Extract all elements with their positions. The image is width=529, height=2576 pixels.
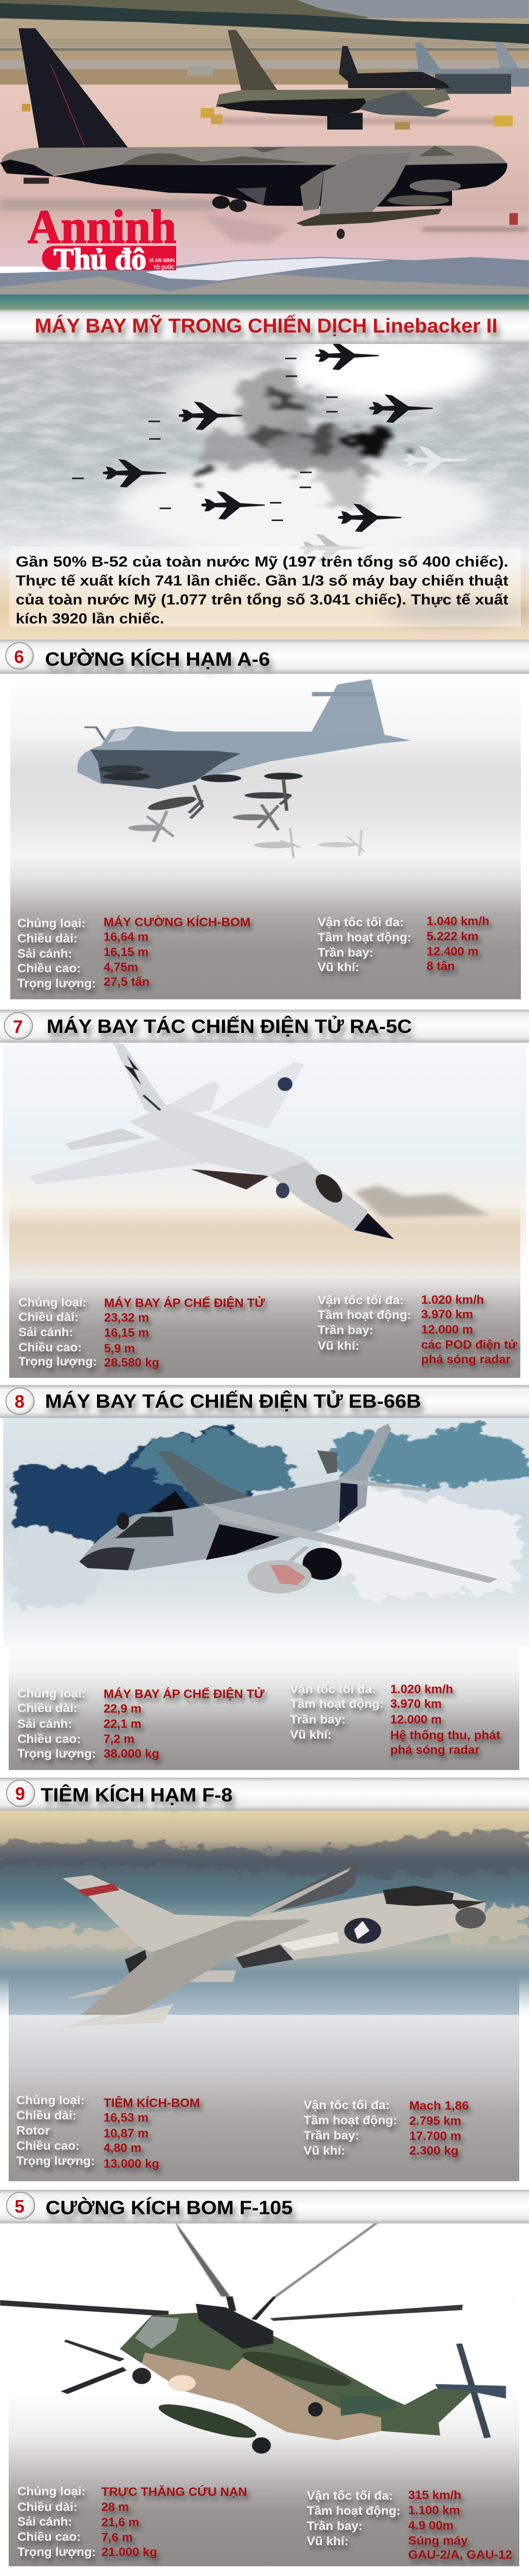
panel: A-6 attack aircraft (10, 674, 521, 999)
icon: helicopter (0, 2297, 506, 2454)
panel: hero photo of B-52 bombers (0, 0, 529, 310)
data table: helicopter specifications: TRỰC THĂNG CỨU NẠN (101, 2485, 247, 2499)
icon: upper rotor blades (175, 2204, 404, 2297)
data table: A-6 specifications: Vũ khí: (318, 960, 359, 974)
data table: helicopter specifications: 21.000 kg (101, 2545, 157, 2559)
badge 7: 7 (13, 1017, 23, 1037)
data table: A-6 specifications: Sải cánh: (17, 947, 72, 960)
heading text: TIÊM KÍCH HẠM F-8 (41, 1784, 233, 1806)
badge 7 (4, 1013, 33, 1039)
title bar (0, 310, 529, 344)
data table: helicopter specifications: Vũ khí: (307, 2534, 349, 2548)
data table: helicopter specifications: 21,6 m (101, 2515, 139, 2529)
logo: An ninh Thủ đô: TỔ QUỐC (153, 263, 175, 271)
data table: F-8 specifications: Tầm hoạt động: (304, 2113, 397, 2127)
data table: RA-5C specifications: Vũ khí: (318, 1339, 359, 1352)
icon: F-8 wing tip (54, 2004, 173, 2031)
data table: A-6 specifications: Trọng lượng: (17, 977, 96, 990)
data table: helicopter specifications: GAU-2/A, GAU-12 (408, 2548, 512, 2561)
logo: An ninh Thủ đô (28, 201, 176, 276)
data table: F-8 specifications: Trần bay: (304, 2129, 359, 2142)
icon: A-6 aircraft (78, 679, 411, 789)
data table: RA-5C specifications: 3.970 km (421, 1307, 473, 1321)
data table: helicopter specifications: Súng máy (408, 2534, 468, 2547)
data table: helicopter specifications: Sải cánh: (17, 2515, 72, 2528)
data table: RA-5C specifications: 12.000 m (421, 1323, 473, 1336)
data table: A-6 specifications: Vận tốc tối đa: (318, 915, 404, 929)
badge 8: 8 (15, 1391, 24, 1411)
text block: intro statistics: của toàn nước Mỹ (1.077 trên tổng số 3.041 chiếc). Thực tế xuất (16, 591, 508, 608)
data table: F-8 specifications: Chiều cao: (16, 2139, 80, 2152)
icon: RA-5C aircraft (29, 1043, 394, 1239)
badge 6 (5, 642, 34, 669)
data table: helicopter specifications: Trần bay: (307, 2519, 363, 2533)
text block: intro statistics: kích 3920 lần chiếc. (16, 610, 164, 627)
heading: section 8 (0, 1385, 529, 1418)
data table: A-6 specifications: 1.040 km/h (427, 914, 489, 928)
data table: A-6 specifications: Chủng loại: (17, 916, 86, 930)
data table: A-6 specifications: 27,5 tấn (104, 975, 150, 988)
heading: section 5 (0, 2190, 529, 2223)
data table: EB-66B specifications: 38.000 kg (104, 1747, 159, 1760)
logo: An ninh Thủ đô: VÌ AN NINH (149, 257, 175, 264)
background mountain (354, 1185, 489, 1217)
data table: F-8 specifications: Rotor (16, 2124, 50, 2137)
data table: helicopter specifications: Trọng lượng: (17, 2545, 96, 2559)
data table: RA-5C specifications: Chủng loại: (18, 1296, 87, 1309)
data table: RA-5C specifications: phá sóng radar (421, 1352, 511, 1366)
data table: A-6 specifications: 12.400 m (427, 945, 479, 958)
panel: EB-66B electronic warfare aircraft (0, 1418, 529, 1771)
data table: A-6 specifications: 16,64 m (104, 930, 149, 944)
data table: RA-5C specifications: 16,15 m (104, 1326, 149, 1339)
data table: RA-5C specifications (18, 1293, 517, 1369)
data table: EB-66B specifications: Hệ thống thu, phát (390, 1728, 501, 1742)
icon: F-8 aircraft (62, 1863, 486, 2015)
data table: A-6 specifications: Trần bay: (318, 946, 373, 959)
data table: EB-66B specifications: Vận tốc tối đa: (290, 1682, 376, 1696)
background: cloud texture (0, 344, 529, 558)
heading text: CƯỜNG KÍCH BOM F-105 (46, 2197, 293, 2219)
panel: F-8 naval fighter (0, 1811, 529, 2181)
data table: F-8 specifications: 4,80 m (104, 2141, 141, 2155)
badge 5: 5 (15, 2196, 24, 2216)
data table: EB-66B specifications: 3.970 km (390, 1697, 442, 1710)
icon: falling bombs (128, 780, 364, 858)
heading text: MÁY BAY TÁC CHIẾN ĐIỆN TỬ RA-5C (47, 1016, 412, 1037)
data table: EB-66B specifications: Sải cánh: (17, 1717, 72, 1731)
heading: section 7 (0, 1010, 529, 1043)
data table: EB-66B specifications: Chiều dài: (17, 1701, 78, 1715)
data table: helicopter specifications: 4.9 00m (408, 2519, 454, 2532)
data table: A-6 specifications: 8 tấn (427, 959, 455, 973)
badge 9 (7, 1780, 35, 1807)
data table: EB-66B specifications: phá sóng radar (390, 1743, 480, 1757)
data table: EB-66B specifications: 1.020 km/h (390, 1682, 453, 1696)
data table: F-8 specifications: Mach 1,86 (409, 2099, 469, 2112)
data table: EB-66B specifications: Chủng loại: (17, 1687, 86, 1700)
data table: RA-5C specifications: Trần bay: (318, 1323, 373, 1337)
data table: RA-5C specifications: 1.020 km/h (421, 1293, 484, 1306)
badge 8 (6, 1388, 34, 1415)
background cloud bands (0, 1829, 529, 1949)
data table: EB-66B specifications (17, 1682, 501, 1760)
data table: helicopter specifications: Tầm hoạt động: (307, 2504, 401, 2518)
logo: An ninh Thủ đô: Thủ đô (54, 243, 146, 276)
data table: helicopter specifications: Chiều cao: (17, 2530, 81, 2544)
icon: EB-66B aircraft (79, 1423, 498, 1593)
data table: A-6 specifications: MÁY CƯỜNG KÍCH-BOM (104, 915, 250, 929)
data table: A-6 specifications (17, 914, 489, 990)
data table: F-8 specifications: 2.795 km (409, 2114, 461, 2128)
data table: F-8 specifications: Chủng loại: (16, 2093, 85, 2107)
data table: RA-5C specifications: Vận tốc tối đa: (318, 1293, 404, 1307)
data table: F-8 specifications: 16,53 m (104, 2111, 149, 2124)
data table: A-6 specifications: 5.222 km (427, 929, 479, 943)
data table: EB-66B specifications: MÁY BAY ÁP CHẾ ĐIỆN TỬ (104, 1687, 265, 1701)
panel: HH-53 rescue helicopter (0, 2204, 519, 2566)
title: MÁY BAY MỸ TRONG CHIẾN DỊCH Linebacker II (35, 314, 498, 337)
data table: F-8 specifications: 13.000 kg (104, 2157, 159, 2170)
logo: An ninh Thủ đô: Anninh (28, 201, 176, 253)
data table: F-8 specifications: TIÊM KÍCH-BOM (104, 2096, 200, 2110)
text block: intro statistics: Thực tế xuất kích 741 lần chiếc. Gần 1/3 số máy bay chiến thuật (16, 573, 508, 589)
data table: RA-5C specifications: 5,9 m (104, 1342, 135, 1355)
data table: helicopter specifications: Chiều dài: (17, 2500, 78, 2514)
heading: section 9 (0, 1778, 529, 1811)
heading: section 6 (0, 640, 529, 674)
data table: helicopter specifications: 7,6 m (101, 2531, 133, 2544)
icon: fighter-bomber formation (72, 342, 433, 532)
data table: RA-5C specifications: Tầm hoạt động: (318, 1308, 411, 1322)
data table: RA-5C specifications: Chiều dài: (18, 1310, 79, 1324)
data table: A-6 specifications: Chiều dài: (17, 932, 78, 945)
icon: far bomber tails and hangar (187, 43, 529, 94)
data table: EB-66B specifications: 22,9 m (104, 1702, 141, 1715)
data table: helicopter specifications: 1.100 km (408, 2503, 460, 2517)
data table: A-6 specifications: Tầm hoạt động: (318, 931, 411, 944)
data table: RA-5C specifications: các POD điện tử (421, 1338, 517, 1351)
data table: EB-66B specifications: Tầm hoạt động: (290, 1697, 384, 1710)
data table: F-8 specifications: 10,87 m (104, 2126, 149, 2140)
icon: main B-52 bomber (0, 28, 518, 239)
smoke clouds (115, 329, 529, 623)
heading text: MÁY BAY TÁC CHIẾN ĐIỆN TỬ EB-66B (45, 1390, 421, 1412)
data table: F-8 specifications (16, 2093, 469, 2170)
data table: RA-5C specifications: Chiều cao: (18, 1341, 82, 1354)
data table: F-8 specifications: Vận tốc tối đa: (304, 2098, 390, 2112)
data table: EB-66B specifications: 7,2 m (104, 1732, 134, 1746)
data table: A-6 specifications: Chiều cao: (17, 961, 81, 975)
panel: bomber formation photo with intro text (0, 329, 529, 640)
background clouds (14, 1422, 529, 1611)
data table: F-8 specifications: Vũ khí: (304, 2144, 345, 2157)
data table: EB-66B specifications: Trần bay: (290, 1713, 346, 1726)
data table: EB-66B specifications: Chiều cao: (17, 1732, 81, 1746)
badge 5 (7, 2193, 35, 2219)
data table: RA-5C specifications: MÁY BAY ÁP CHẾ ĐIỆN TỬ (104, 1296, 266, 1310)
data table: A-6 specifications: 16,15 m (104, 945, 149, 959)
badge 9: 9 (15, 1784, 25, 1804)
data table: EB-66B specifications: Trọng lượng: (17, 1747, 96, 1760)
data table: helicopter specifications (17, 2484, 512, 2561)
data table: F-8 specifications: 2.300 kg (409, 2144, 459, 2157)
heading text: CƯỜNG KÍCH HẠM A-6 (45, 648, 270, 670)
data table: F-8 specifications: 17.700 m (409, 2129, 461, 2143)
data table: helicopter specifications: Chủng loại: (17, 2484, 86, 2498)
data table: RA-5C specifications: Trọng lượng: (18, 1355, 97, 1368)
data table: EB-66B specifications: Vũ khí: (290, 1728, 332, 1741)
data table: RA-5C specifications: 28.580 kg (104, 1356, 159, 1369)
text block: intro statistics: Gần 50% B-52 của toàn nước Mỹ (197 trên tổng số 400 chiếc). (16, 554, 508, 570)
badge 6: 6 (14, 647, 24, 667)
data table: helicopter specifications: 28 m (101, 2500, 129, 2514)
text block: intro statistics (9, 547, 521, 627)
icon: rear B-52 bomber (22, 30, 513, 129)
data table: helicopter specifications: Vận tốc tối đa: (307, 2489, 393, 2502)
data table: EB-66B specifications: 12.000 m (390, 1713, 442, 1726)
panel: RA-5C electronic warfare aircraft (3, 1043, 526, 1378)
data table: A-6 specifications: 4,75m (104, 960, 138, 974)
data table: RA-5C specifications: Sải cánh: (18, 1325, 73, 1339)
icon: snowy mountains (0, 257, 529, 295)
data table: F-8 specifications: Chiều dài: (16, 2109, 76, 2122)
data table: helicopter specifications: 315 km/h (408, 2488, 461, 2502)
data table: RA-5C specifications: 23,32 m (104, 1311, 149, 1324)
data table: F-8 specifications: Trọng lượng: (16, 2154, 95, 2168)
data table: EB-66B specifications: 22,1 m (104, 1717, 141, 1731)
